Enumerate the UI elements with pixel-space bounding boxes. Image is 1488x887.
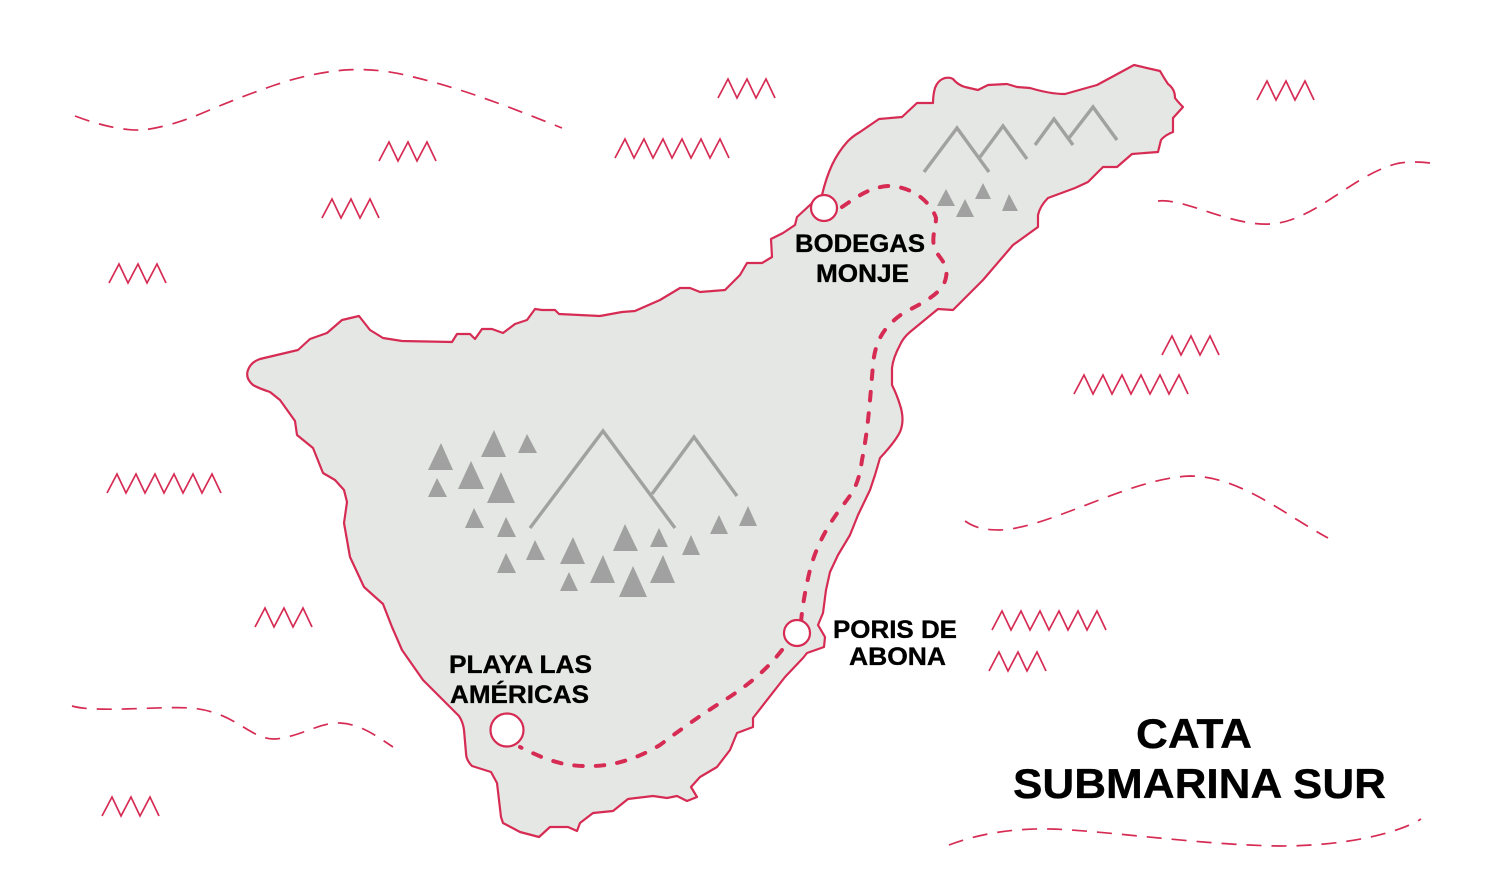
title: SUBMARINA SUR — [1013, 760, 1386, 807]
label: Poris de Abona: ABONA — [849, 643, 946, 671]
label: Poris de Abona — [833, 616, 957, 671]
wave: top right — [1158, 162, 1430, 224]
label: Playa Las Américas: PLAYA LAS — [449, 651, 592, 679]
wave: bottom left — [72, 706, 393, 747]
route: Bodegas Monje to Poris de Abona — [801, 186, 947, 622]
wave: top left — [75, 70, 562, 130]
stop marker: Poris de Abona — [784, 620, 810, 646]
dashed sea waves — [72, 70, 1430, 846]
label: Bodegas Monje: BODEGAS — [795, 230, 925, 258]
stop marker: Bodegas Monje — [811, 195, 837, 221]
title: CATA — [1136, 710, 1252, 757]
stop marker: Playa Las Américas — [490, 714, 524, 746]
route: Poris de Abona to Playa Las Américas — [520, 650, 782, 766]
title — [1013, 710, 1386, 807]
label: Bodegas Monje — [795, 230, 925, 288]
wave: bottom right — [949, 819, 1421, 846]
mountains: central Teide range — [428, 430, 757, 597]
label: Poris de Abona: PORIS DE — [833, 616, 957, 644]
label: Playa Las Américas: AMÉRICAS — [450, 680, 589, 709]
island outline — [247, 65, 1183, 837]
label: Playa Las Américas — [449, 651, 592, 709]
zigzag sea marks — [102, 79, 1314, 816]
mountains: north-east range — [924, 107, 1117, 217]
label: Bodegas Monje: MONJE — [816, 260, 909, 288]
wave: middle right — [965, 476, 1328, 538]
